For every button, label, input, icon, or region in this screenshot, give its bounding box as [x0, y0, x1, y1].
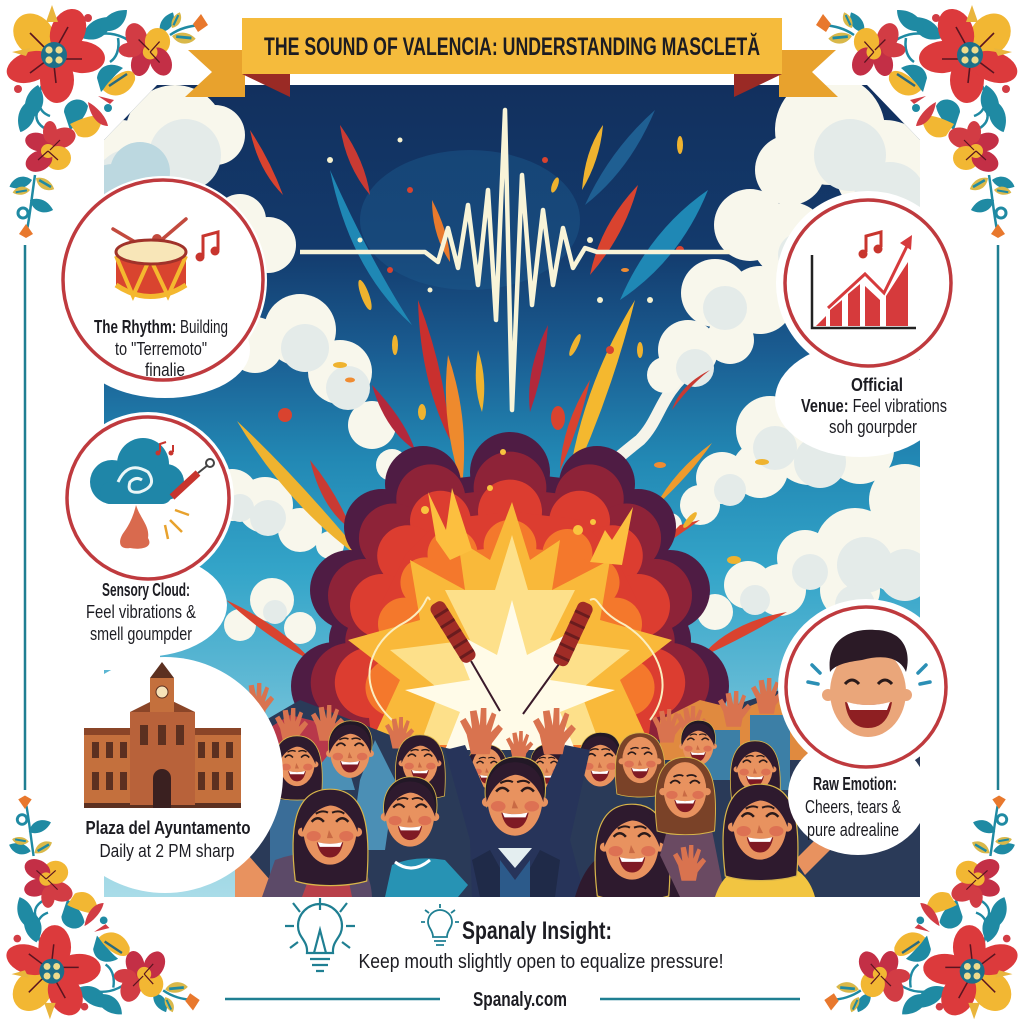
firecrackers	[369, 597, 663, 720]
text: raw emotion: Cheers, tears &	[805, 796, 901, 817]
text: the rhythm: finalie	[145, 359, 185, 380]
text: official venue	[801, 374, 947, 437]
icon: small light bulb	[421, 904, 459, 945]
text: official venue: Venue: Feel vibrations	[801, 395, 947, 416]
person: woman back right	[655, 757, 725, 897]
text: official venue: Official	[851, 374, 903, 395]
callout: sensory cloud	[67, 417, 229, 644]
text: the rhythm	[94, 316, 228, 380]
text: raw emotion: Raw Emotion:	[813, 773, 897, 794]
person: woman teal shirt	[381, 777, 468, 897]
decorative corner: top right	[816, 3, 1021, 238]
crowd	[235, 678, 920, 901]
title banner	[185, 18, 838, 97]
icon: large light bulb	[285, 898, 355, 971]
text: sensory cloud: Sensory Cloud:	[102, 579, 190, 600]
person: woman yellow shirt	[715, 784, 830, 897]
text: plaza del ayuntamento	[86, 817, 250, 861]
person: background row	[270, 720, 780, 880]
icon: swirl cloud and nose	[90, 438, 214, 549]
text: insight tip: Keep mouth slightly open to equalize pressure!	[358, 951, 724, 973]
person: woman left	[235, 789, 372, 897]
explosion	[291, 432, 729, 780]
confetti and streaks	[226, 110, 787, 661]
text: sensory cloud: smell goumpder	[90, 623, 192, 644]
icon: rising chart with music note	[812, 232, 916, 328]
text: plaza del ayuntamento: Plaza del Ayuntamento	[86, 817, 250, 838]
icon: laughing face	[808, 630, 930, 737]
text: website: Spanaly.com	[473, 989, 567, 1011]
text: raw emotion: pure adrealine	[807, 819, 899, 840]
text: official venue: soh gourpder	[829, 416, 917, 437]
callout: raw emotion	[786, 607, 946, 840]
callout: plaza del ayuntamento	[84, 662, 250, 861]
text: the rhythm: to "Terremoto"	[115, 338, 207, 359]
decorative corner: top left	[3, 3, 208, 238]
central illustration scene	[70, 75, 941, 901]
callout: the rhythm	[63, 180, 263, 380]
text: raw emotion	[805, 773, 901, 840]
person: man in suit	[445, 708, 590, 897]
icon: drum	[113, 219, 220, 296]
title banner: THE SOUND OF VALENCIA: UNDERSTANDING MASCLETĂ	[264, 32, 760, 61]
sound waveform	[300, 110, 730, 410]
heading: insight: Spanaly Insight:	[462, 917, 612, 945]
decorative corner: bottom right	[824, 796, 1022, 1021]
callout: official venue	[785, 200, 951, 437]
text: the rhythm: The Rhythm: Building	[94, 316, 228, 337]
insight footer	[225, 898, 800, 1011]
white panels behind callouts	[47, 176, 960, 893]
text: sensory cloud: Feel vibrations &	[86, 601, 197, 622]
person: woman centre right	[575, 804, 685, 901]
icon: town hall building	[84, 662, 241, 808]
text: plaza del ayuntamento: Daily at 2 PM sharp	[100, 840, 234, 861]
decorative corner: bottom left	[2, 796, 200, 1021]
text: sensory cloud	[86, 579, 197, 644]
clouds	[70, 75, 941, 644]
